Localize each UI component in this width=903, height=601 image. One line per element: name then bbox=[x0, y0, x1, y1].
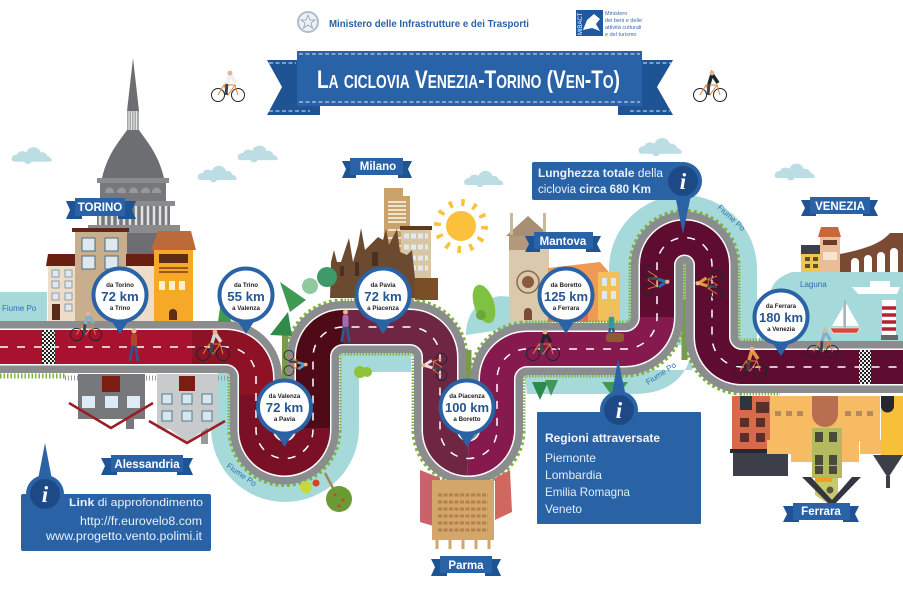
callout: total length bbox=[532, 162, 702, 234]
river labels: Fiume Po bbox=[225, 461, 259, 489]
pin: da Boretto 125 km a Ferrara bbox=[540, 268, 592, 334]
pin: da Ferrara 180 km a Venezia: a Venezia bbox=[767, 326, 795, 333]
callout: total length: Lunghezza totale della bbox=[538, 168, 664, 180]
buildings: Parma (upside down) bbox=[420, 470, 512, 549]
pin: da Trino 55 km a Valenza: 55 km bbox=[227, 289, 265, 304]
callout: link: i bbox=[42, 482, 49, 507]
river labels bbox=[2, 203, 827, 489]
logo: mibact: Ministero bbox=[605, 11, 627, 17]
pin: da Trino 55 km a Valenza: da Trino bbox=[234, 282, 258, 289]
road bbox=[0, 237, 903, 459]
pin: da Piacenza 100 km a Boretto bbox=[440, 380, 494, 447]
pin: da Boretto 125 km a Ferrara: 125 km bbox=[544, 289, 588, 304]
city label: Alessandria bbox=[101, 455, 193, 475]
city label: Ferrara bbox=[783, 503, 859, 522]
logo: mibact: dei beni e delle bbox=[605, 18, 642, 24]
pin: da Ferrara 180 km a Venezia: da Ferrara bbox=[766, 303, 797, 310]
pin: da Pavia 72 km a Piacenza bbox=[356, 268, 410, 334]
grass along road bbox=[0, 237, 780, 458]
logo: mibact bbox=[576, 10, 642, 38]
icon: cyclist top left bbox=[212, 71, 244, 102]
logo: ministero infrastrutture bbox=[298, 12, 529, 32]
landmark: Mole Antonelliana bbox=[88, 58, 180, 273]
pin: da Valenza 72 km a Pavia: a Pavia bbox=[274, 416, 296, 423]
pin: da Ferrara 180 km a Venezia: 180 km bbox=[759, 310, 803, 325]
logo: mibact: e del turismo bbox=[605, 32, 636, 38]
logo: mibact: MiBACT bbox=[578, 12, 584, 35]
callout: regions: Regioni attraversate bbox=[545, 431, 660, 445]
pin: da Torino 72 km a Trino bbox=[94, 268, 146, 334]
callout: regions: Emilia Romagna bbox=[545, 485, 630, 499]
pin: da Piacenza 100 km a Boretto: 100 km bbox=[445, 400, 489, 415]
callout: link: Link di approfondimento bbox=[69, 497, 203, 509]
city label: Milano bbox=[342, 158, 412, 178]
title banner bbox=[267, 51, 673, 115]
callout: regions bbox=[537, 359, 701, 524]
buildings: Venezia bbox=[801, 227, 903, 272]
callout: regions: Piemonte bbox=[545, 451, 596, 465]
city label: Parma bbox=[431, 556, 501, 576]
buildings: Mantova bbox=[506, 213, 620, 322]
city label: Torino: TORINO bbox=[78, 202, 122, 214]
city label: Milano: Milano bbox=[360, 161, 396, 173]
river: Po teal areas bbox=[0, 195, 903, 502]
city label: Alessandria: Alessandria bbox=[114, 459, 180, 471]
river labels: Laguna bbox=[800, 280, 827, 289]
logo: ministero infrastrutture: Ministero delle Infrastrutture e dei Trasporti bbox=[329, 18, 529, 30]
pin: da Trino 55 km a Valenza: a Valenza bbox=[232, 305, 260, 312]
city label: Ferrara: Ferrara bbox=[801, 506, 841, 518]
title: La ciclovia Venezia-Torino (Ven-To) bbox=[317, 66, 620, 94]
logo: mibact: attività culturali bbox=[605, 25, 641, 31]
callout: regions: Lombardia bbox=[545, 468, 602, 482]
houses: Alessandria (upside down) bbox=[65, 374, 230, 444]
buildings: Milano bbox=[330, 188, 438, 300]
buildings: Torino bbox=[46, 228, 196, 322]
icon: sun bbox=[438, 202, 484, 250]
callout: regions: Veneto bbox=[545, 502, 582, 516]
river labels: Fiume Po bbox=[644, 360, 678, 387]
tree: green bush bbox=[468, 282, 500, 326]
tree: red fruit bbox=[300, 366, 372, 512]
callout: link: www.progetto.vento.polimi.it bbox=[45, 531, 203, 543]
city label: Torino bbox=[66, 198, 136, 219]
callout: link: http://fr.eurovelo8.com bbox=[80, 516, 202, 528]
pin: da Pavia 72 km a Piacenza: a Piacenza bbox=[367, 305, 399, 312]
pin: da Piacenza 100 km a Boretto: a Boretto bbox=[453, 416, 481, 423]
city label: Parma: Parma bbox=[448, 560, 484, 572]
pin: da Valenza 72 km a Pavia bbox=[258, 380, 311, 447]
pin: da Boretto 125 km a Ferrara: a Ferrara bbox=[553, 305, 580, 312]
pin: da Trino 55 km a Valenza bbox=[220, 268, 272, 334]
pin: da Pavia 72 km a Piacenza: 72 km bbox=[364, 289, 402, 304]
pin: da Boretto 125 km a Ferrara: da Boretto bbox=[551, 282, 582, 289]
pin: da Ferrara 180 km a Venezia bbox=[754, 290, 808, 356]
pin: da Torino 72 km a Trino: 72 km bbox=[101, 289, 139, 304]
callout: regions: i bbox=[616, 398, 623, 423]
river labels: Fiume Po bbox=[716, 203, 747, 233]
buildings: Ferrara (upside down) bbox=[730, 396, 903, 507]
icon: cyclist top right bbox=[694, 71, 726, 102]
trees: Milano foreground bbox=[218, 267, 628, 400]
callout: total length: i bbox=[680, 169, 687, 194]
sailboat, ship and lighthouse bbox=[830, 281, 900, 340]
pin: da Pavia 72 km a Piacenza: da Pavia bbox=[370, 282, 396, 289]
riders on the road bbox=[70, 265, 839, 381]
pin: da Piacenza 100 km a Boretto: da Piacenza bbox=[449, 393, 485, 400]
pin: da Valenza 72 km a Pavia: da Valenza bbox=[269, 393, 301, 400]
callout: link bbox=[21, 443, 211, 551]
city label: Mantova: Mantova bbox=[540, 236, 587, 248]
city label: Mantova bbox=[525, 232, 601, 252]
clouds bbox=[12, 138, 815, 187]
callout: total length: ciclovia circa 680 Km bbox=[538, 184, 651, 196]
pin: da Valenza 72 km a Pavia: 72 km bbox=[266, 400, 303, 415]
pin: da Torino 72 km a Trino: da Torino bbox=[106, 282, 134, 289]
city label: Venezia: VENEZIA bbox=[815, 201, 865, 213]
city label: Venezia bbox=[801, 197, 878, 216]
river labels: Fiume Po bbox=[2, 304, 37, 313]
pin: da Torino 72 km a Trino: a Trino bbox=[110, 305, 130, 312]
